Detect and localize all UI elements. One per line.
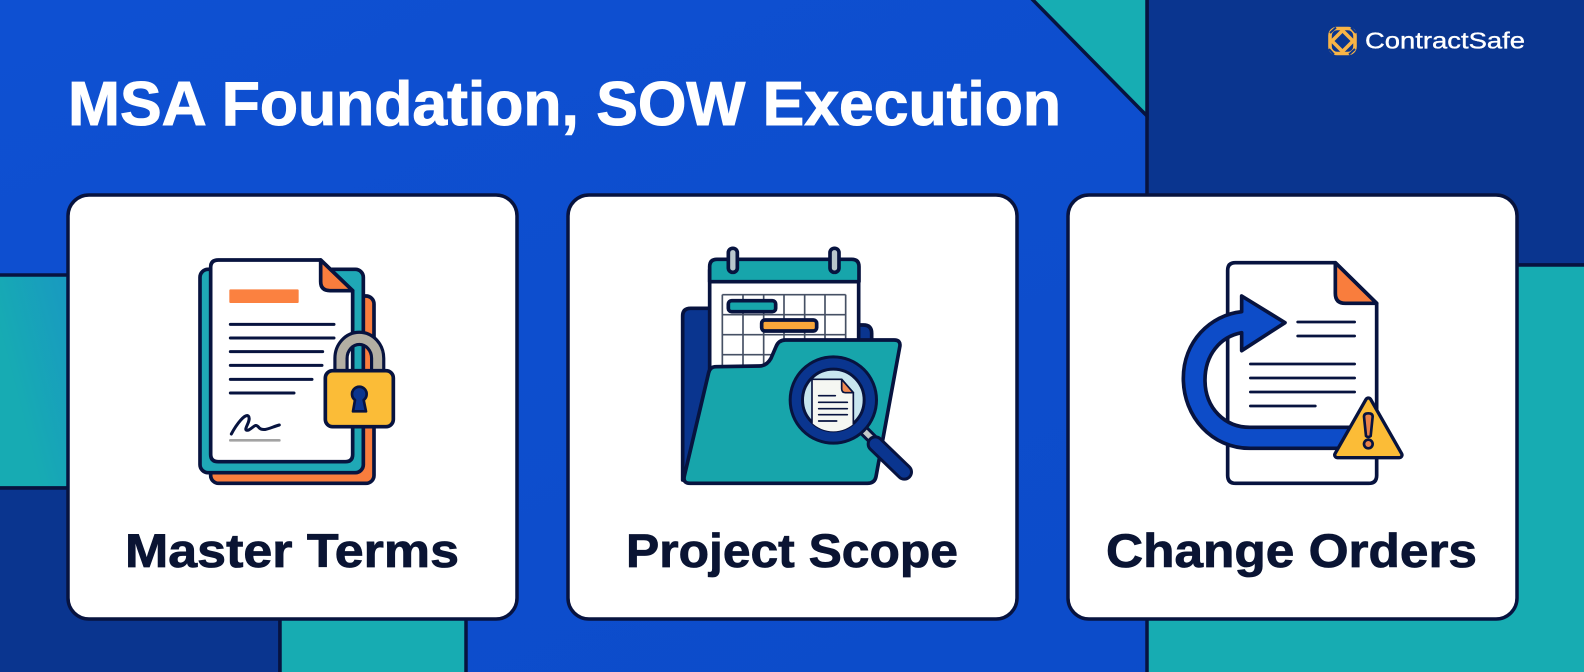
- lock body: [325, 371, 393, 427]
- panel: Master Terms: [68, 195, 517, 619]
- calendar rings: [728, 248, 737, 272]
- calendar page: [710, 270, 859, 377]
- icon: document with change arrow and warning: [1183, 263, 1399, 483]
- page fold: [321, 260, 353, 291]
- block: top teal triangle: [1030, 0, 1147, 116]
- exclamation mark: [1364, 413, 1373, 437]
- padlock: [325, 338, 393, 427]
- text lines: [1250, 322, 1355, 406]
- warning triangle: [1337, 401, 1399, 455]
- front folder: [684, 340, 900, 483]
- orange timeline bar: [762, 320, 817, 331]
- icon: logo knot: [1329, 28, 1356, 54]
- calendar grid: [722, 295, 846, 370]
- back folder: [683, 308, 872, 480]
- panel: Change Orders: [1068, 195, 1517, 619]
- text lines: [230, 324, 334, 393]
- orange heading bar: [229, 289, 299, 303]
- handle: [875, 444, 904, 472]
- white document: [211, 260, 353, 462]
- panel label: Master Terms: [125, 524, 459, 577]
- document in lens: [812, 379, 853, 437]
- curved arrow: [1183, 296, 1350, 448]
- signature rule: [230, 436, 279, 444]
- block: left teal: [0, 275, 85, 488]
- teal middle sheet: [200, 269, 363, 473]
- card background: [1068, 195, 1517, 619]
- panel label: Project Scope: [626, 524, 958, 577]
- calendar: [710, 248, 859, 377]
- card background: [568, 195, 1017, 619]
- handle neck: [862, 428, 873, 440]
- signature: [231, 416, 279, 434]
- orange back sheet: [211, 296, 374, 483]
- panel label: Change Orders: [1106, 524, 1477, 577]
- title: MSA Foundation, SOW Execution: [68, 70, 1061, 139]
- block: right teal: [1147, 265, 1584, 672]
- teal timeline bar: [728, 301, 776, 312]
- panel: Project Scope: [568, 195, 1017, 619]
- icon: calendar folder and magnifier: [683, 248, 904, 483]
- triangle: [1337, 401, 1399, 455]
- icon: locked signed document: [200, 260, 393, 483]
- lens ring: [796, 363, 870, 437]
- calendar header: [710, 259, 859, 282]
- logo: ContractSafe: [1329, 28, 1525, 54]
- magnifier: [796, 363, 904, 472]
- keyhole: [352, 387, 367, 411]
- block: bottom teal: [280, 600, 466, 672]
- block: top right navy: [1147, 0, 1584, 265]
- document: [1228, 263, 1377, 483]
- card background: [68, 195, 517, 619]
- block: bottom left navy: [0, 488, 280, 672]
- logo wordmark: ContractSafe: [1365, 28, 1525, 54]
- page fold: [1335, 263, 1377, 303]
- shackle: [341, 338, 378, 373]
